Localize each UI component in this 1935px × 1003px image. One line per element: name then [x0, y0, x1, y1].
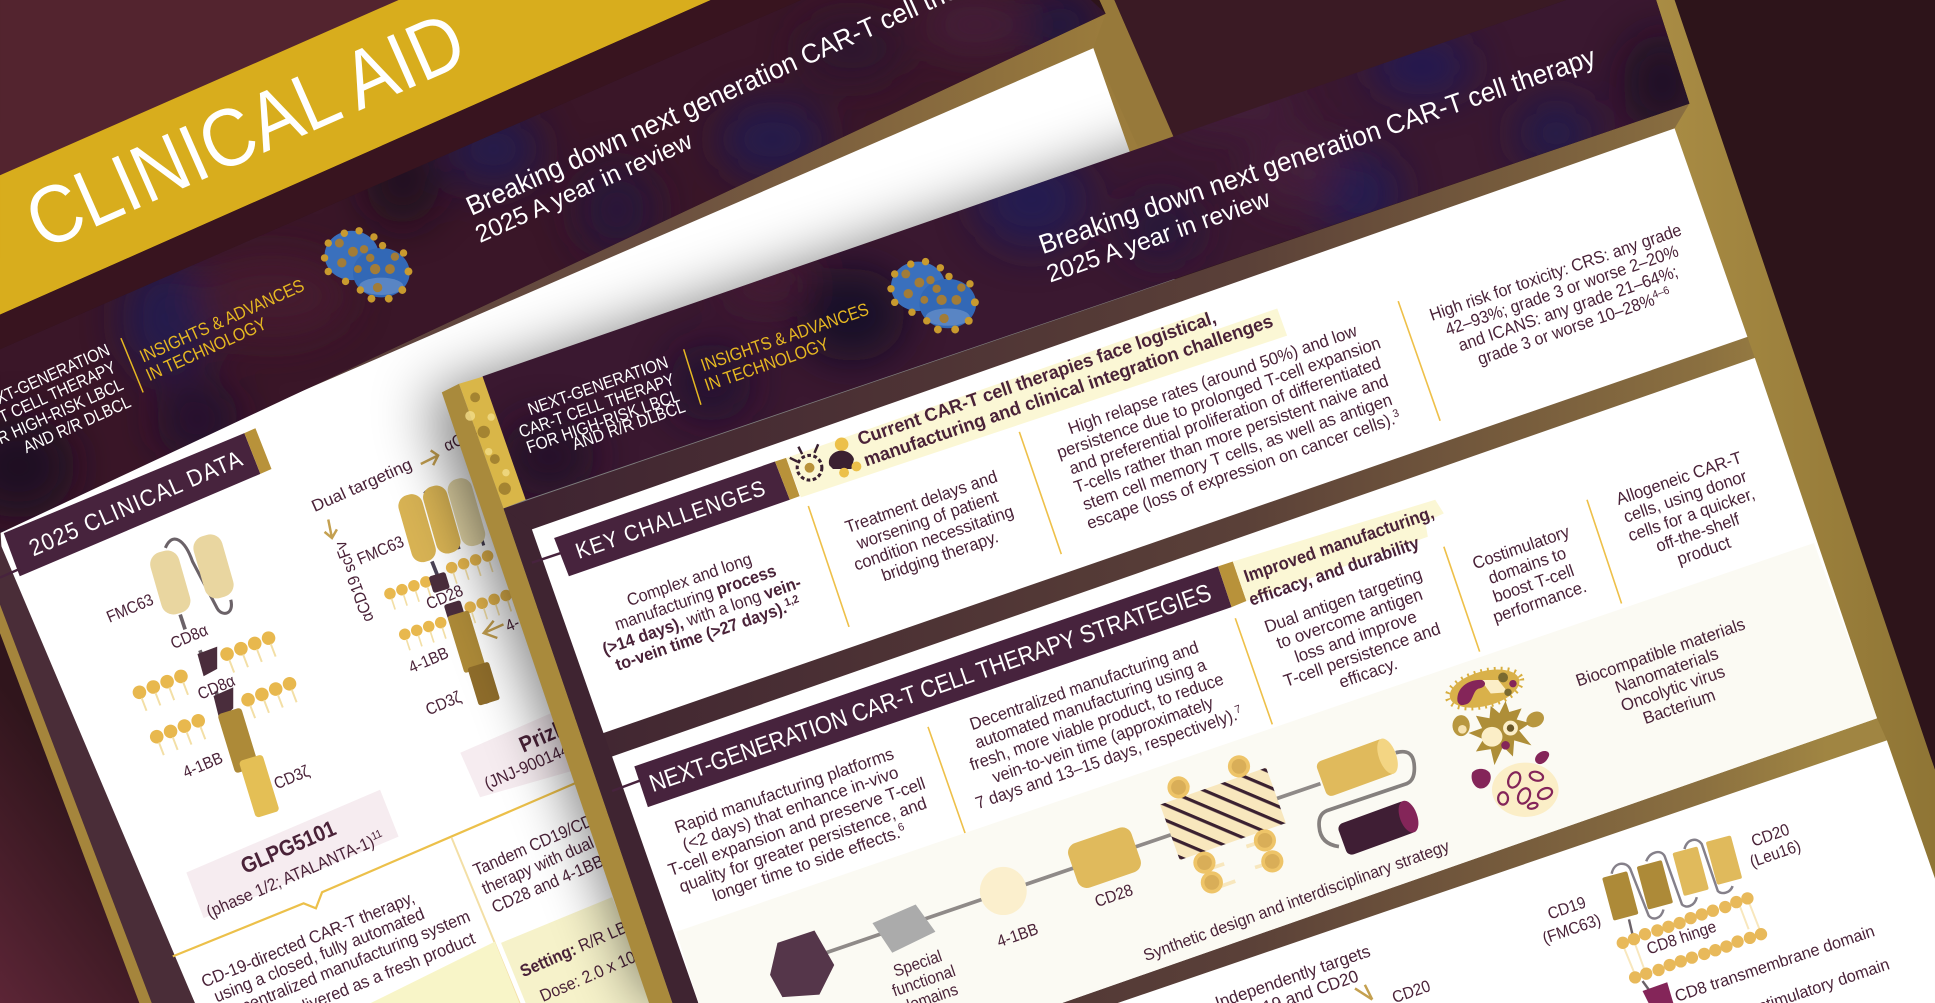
icon: cylinders	[1315, 736, 1422, 856]
panel: next-generation strategies	[612, 358, 1877, 1003]
icon: bacterium	[1443, 662, 1526, 715]
back card header	[0, 0, 1111, 543]
dual targeting molecule: prizloncabtagene: αCD20 scFv	[441, 405, 526, 455]
text: rapid: T-cell expansion and preserve T-cell	[666, 774, 928, 880]
icon: virus	[321, 227, 412, 303]
text: dual antigen	[1262, 565, 1450, 709]
shadow of front card on back card	[396, 114, 1174, 1003]
tandem text: Setting: R/R LBCL	[517, 909, 649, 981]
text: dual antigen: Dual antigen targeting	[1262, 565, 1425, 637]
component labels: CD28	[1093, 882, 1136, 911]
text: toxicity: 42–93%; grade 3 or worse 2–20%	[1443, 241, 1681, 340]
dual targeting molecule: prizloncabtagene: CD28	[424, 582, 466, 614]
text: costimulatory: domains to	[1486, 543, 1569, 588]
text: allogeneic: Allogeneic CAR-T	[1614, 448, 1744, 509]
back card right gold edge	[1093, 0, 1174, 147]
back header title: 2025 A year in review	[471, 128, 697, 249]
clinical data tab: 2025 CLINICAL DATA	[25, 445, 247, 561]
dual targeting molecule: prizloncabtagene: αCD19 scFv	[332, 539, 378, 624]
front card frame	[503, 104, 1935, 1003]
front header divider	[684, 349, 701, 405]
key challenges tab	[532, 458, 800, 576]
text: toxicity: and ICANS: any grade 21–64%;	[1456, 262, 1680, 355]
text: process: to-vein time (>27 days).	[613, 598, 789, 675]
front card right gold edge	[1656, 0, 1935, 879]
text: materials: Bacterium	[1640, 685, 1718, 728]
dividers	[928, 500, 1622, 833]
cream strip	[676, 543, 1877, 1003]
icon: diamond domain	[872, 905, 935, 953]
front header gold labels: INSIGHTS & ADVANCES	[698, 299, 871, 375]
tandem text: Tandem CD19/CD20 CAR-T	[470, 782, 661, 880]
text: toxicity: 4–6	[1651, 284, 1671, 302]
text: rapid: (<2 days) that enhance in-vivo	[680, 763, 901, 855]
component labels: Special	[891, 948, 944, 981]
GLPG5101 label	[186, 790, 399, 922]
front card	[442, 0, 1935, 1003]
component labels	[890, 882, 1136, 1003]
front header gold labels: IN TECHNOLOGY	[702, 334, 831, 395]
background: top left burgundy corner	[0, 0, 407, 180]
text: costimulatory: Costimulatory	[1470, 522, 1573, 573]
back header left labels	[0, 341, 134, 457]
text: materials	[1573, 614, 1766, 745]
text: delays: condition necessitating	[851, 502, 1016, 575]
prizloncabtagene label: (JNJ-90014496)	[481, 730, 594, 794]
text: process	[587, 536, 810, 677]
synthetic construct diagram	[770, 662, 1559, 1003]
text: dual antigen: efficacy.	[1336, 654, 1400, 692]
molecule labels: CD19	[1546, 894, 1588, 924]
text: relapse: High relapse rates (around 50%) and low	[1066, 321, 1360, 438]
back card	[0, 0, 1185, 1003]
molecule: GLPG5101 construct: CD8α	[168, 622, 211, 653]
back header left labels: AND R/R DLBCL	[20, 392, 134, 457]
molecule labels: (FMC63)	[1540, 912, 1603, 948]
tandem text: therapy with dual	[479, 832, 597, 899]
back header gold labels: IN TECHNOLOGY	[143, 314, 270, 385]
strategies tab: NEXT-GENERATION CAR-T CELL THERAPY STRATEGIES	[646, 580, 1215, 798]
back header divider	[121, 338, 143, 392]
front card header	[469, 0, 1703, 518]
icon: hexagon domain	[770, 930, 834, 997]
text: decentralized: Decentralized manufacturing and	[967, 637, 1201, 734]
molecule labels: (Leu16)	[1748, 838, 1803, 871]
front card left gold edge	[442, 384, 673, 1003]
text: toxicity: grade 3 or worse 10–28%	[1475, 290, 1657, 369]
back card left plum edge	[0, 543, 195, 1003]
dual targeting molecule: prizloncabtagene: CD3ζ	[423, 689, 464, 719]
dual targeting molecule: prizloncabtagene: Dual targeting	[309, 455, 415, 516]
molecule labels: CD20	[1749, 821, 1792, 851]
text: process: (>14 days), with a long vein-	[600, 573, 804, 659]
callout line	[173, 781, 580, 956]
text: process: Complex and long	[624, 549, 754, 610]
molecule labels	[1540, 821, 1892, 1003]
background: left burgundy wash	[0, 617, 160, 1003]
front header left labels: CAR-T CELL THERAPY	[516, 370, 677, 442]
panel 2 background	[612, 358, 1877, 1003]
front header left labels	[516, 353, 688, 457]
text: materials: Biocompatible materials	[1573, 614, 1748, 691]
text: delays: worsening of patient	[853, 487, 1001, 554]
vertical divider	[452, 838, 520, 1003]
clinical aid banner	[0, 0, 711, 315]
tandem text	[470, 782, 661, 1003]
back panel: 2025 clinical data	[0, 405, 661, 1003]
text: allogeneic: cells for a quicker,	[1626, 484, 1757, 545]
dual targeting molecule: prizloncabtagene: 4-1BB	[406, 644, 451, 677]
back card white panel	[0, 48, 1185, 1003]
dual targeting molecule: prizloncabtagene: FMC63	[355, 533, 407, 569]
text: rapid: 6	[896, 821, 906, 834]
prizloncabtagene label: Prizlon-cel	[516, 695, 618, 758]
icon: nanoparticle with capsules	[1472, 751, 1559, 817]
text: costimulatory	[1470, 522, 1591, 627]
text: toxicity: High risk for toxicity: CRS: any grade	[1427, 220, 1684, 325]
molecule: GLPG5101 construct: CD3ζ	[272, 763, 312, 793]
text: decentralized: 7	[1233, 703, 1243, 717]
text: allogeneic	[1613, 448, 1770, 582]
text: rapid	[653, 738, 940, 916]
icon: striped transmembrane with dots	[1160, 755, 1286, 893]
text: decentralized	[948, 631, 1245, 813]
text: relapse: persistence due to prolonged T-cell expansion	[1054, 333, 1383, 462]
text: relapse: stem cell memory T cells, as well as antigen	[1080, 390, 1395, 514]
text: dual antigen: loss and improve	[1292, 607, 1419, 667]
front header left labels: NEXT-GENERATION	[525, 353, 671, 419]
text: rapid: Rapid manufacturing platforms	[672, 744, 896, 837]
text: delays: bridging therapy.	[879, 527, 1001, 585]
text: allogeneic: cells, using donor	[1621, 466, 1750, 527]
tandem text: CD28 and 4-1BB	[489, 851, 607, 917]
text: decentralized: fresh, more viable product, to reduce	[967, 669, 1226, 775]
text: decentralized: automated manufacturing using a	[972, 655, 1209, 753]
panel 1 background	[532, 128, 1747, 733]
molecule labels: CD8 hinge	[1645, 918, 1719, 959]
component labels: functional	[890, 963, 958, 1001]
clinical data tab	[0, 428, 271, 578]
GLPG5101 label: GLPG5101	[237, 816, 340, 879]
text: costimulatory: performance.	[1490, 577, 1589, 627]
text: relapse: escape (loss of expression on cancer cells).	[1084, 409, 1397, 533]
text: rapid: longer time to side effects.	[710, 823, 903, 905]
pale yellow highlight	[370, 942, 520, 1003]
molecule: GLPG5101 construct: 4-1BB	[180, 749, 226, 782]
text: process: manufacturing process	[612, 561, 779, 635]
front card left plum strip	[503, 508, 698, 1003]
text: decentralized: vein-to-vein time (approximately	[990, 693, 1216, 787]
dark band under banner	[0, 0, 801, 349]
molecule: GLPG5101 construct	[104, 532, 312, 818]
component labels: 4-1BB	[995, 921, 1041, 951]
back card frame	[0, 0, 1185, 1003]
dual targeting molecule: prizloncabtagene: 4-1BB	[503, 603, 548, 636]
key challenges tab: KEY CHALLENGES	[572, 475, 769, 564]
icon: spiky virus	[1452, 701, 1547, 765]
text: toxicity	[1427, 220, 1703, 379]
text: dual antigen: T-cell persistence and	[1281, 619, 1443, 691]
improvement highlight: Improved manufacturing,	[1241, 502, 1436, 586]
prizloncabtagene label	[460, 695, 618, 797]
icon: 4-1BB circle	[980, 867, 1027, 915]
molecule: GLPG5101 construct: FMC63	[104, 591, 156, 627]
text: allogeneic: product	[1675, 533, 1733, 569]
panel: bottom dual targeting	[1117, 740, 1935, 1003]
front header left labels: AND R/R DLBCL	[570, 397, 688, 454]
text: costimulatory: boost T-cell	[1490, 561, 1577, 607]
panel: key challenges	[532, 128, 1747, 733]
front header left labels: FOR HIGH-RISK LBCL	[524, 387, 682, 457]
icon: t-cell and person	[790, 437, 861, 480]
back card left gold edge	[0, 605, 152, 1003]
GLPG5101 label: (phase 1/2; ATALANTA-1)	[203, 832, 377, 922]
pale yellow setting row	[501, 897, 654, 1003]
dividers	[808, 301, 1440, 627]
dual targeting molecule: prizloncabtagene	[309, 405, 548, 719]
text: relapse: 3	[1391, 407, 1401, 421]
textured gold spine	[459, 376, 526, 508]
text: rapid: quality for greater persistence, and	[677, 793, 929, 896]
text: process: 1,2	[783, 593, 801, 609]
text: delays	[839, 465, 1022, 593]
arrow and CD20 label	[1355, 978, 1433, 1003]
GLPG5101 label: 11	[369, 827, 384, 843]
tandem text: 6	[631, 945, 641, 958]
text: dual antigen: to overcome antigen	[1274, 585, 1425, 653]
icon: CD28 block	[1065, 825, 1144, 891]
dark strip above header	[1114, 0, 1566, 137]
challenge highlight: manufacturing and clinical integration challenges	[861, 310, 1276, 470]
front header title: 2025 A year in review	[1043, 186, 1274, 288]
text: materials: Nanomaterials	[1613, 644, 1721, 697]
text: decentralized: 7 days and 13–15 days, respectively).	[973, 705, 1240, 813]
text: materials: Oncolytic virus	[1618, 662, 1728, 715]
improvement highlight: efficacy, and durability	[1246, 532, 1422, 610]
back panel body text: CD-19-directed CAR-T therapy,	[198, 888, 417, 991]
panel 3 background	[1117, 740, 1935, 1003]
text: delays: Treatment delays and	[843, 467, 1000, 537]
back header gold labels: INSIGHTS & ADVANCES	[137, 275, 307, 367]
molecule: CD19 CD20 construct	[1602, 835, 1767, 1003]
text: relapse: and preferential proliferation of differentiated	[1067, 353, 1383, 478]
molecule: GLPG5101 construct: CD8α	[195, 672, 238, 704]
text: synthetic design: Synthetic design and interdisciplinary strategy	[1141, 837, 1453, 965]
front header title: Breaking down next generation CAR-T cell therapy	[1035, 41, 1600, 260]
challenge highlight	[786, 306, 1287, 497]
icon: virus	[887, 258, 979, 333]
text: relapse: T-cells rather than more persistent naive and	[1071, 371, 1391, 497]
text: relapse	[1048, 315, 1408, 535]
challenge highlight: Current CAR-T cell therapies face logistical,	[855, 306, 1219, 449]
text: allogeneic: off-the-shelf	[1653, 509, 1742, 556]
